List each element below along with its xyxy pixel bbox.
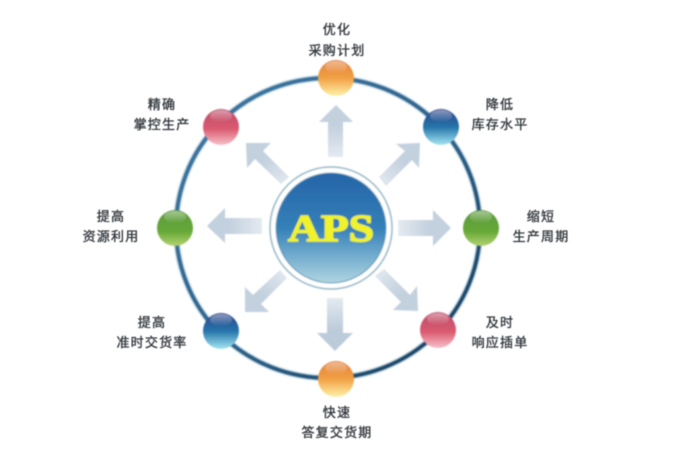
label: respond to insertions (472, 315, 528, 350)
label: shorten cycle (513, 209, 569, 244)
label: quick reply: 快速 (323, 405, 351, 420)
label: optimize purchasing (309, 22, 365, 58)
label: optimize purchasing: 采购计划 (309, 43, 365, 58)
label: on-time delivery: 准时交货率 (116, 335, 188, 350)
node: top orange (318, 60, 354, 96)
node: lower left blue (203, 313, 239, 349)
label: on-time delivery: 提高 (138, 315, 166, 330)
arrow: right (398, 210, 451, 246)
label: resource utilization: 提高 (97, 209, 125, 224)
label: resource utilization: 资源利用 (83, 229, 139, 244)
arrows (207, 105, 451, 351)
ring (176, 78, 480, 378)
label: precise control (134, 97, 190, 132)
arrow: upper left (246, 143, 289, 184)
label: precise control: 掌控生产 (134, 117, 190, 132)
label: on-time delivery (116, 315, 188, 350)
arrow: down (317, 298, 353, 351)
label: resource utilization (83, 209, 139, 244)
arrow: lower left (245, 270, 287, 312)
label: quick reply (301, 405, 373, 440)
central APS circle (270, 167, 392, 289)
label: optimize purchasing: 优化 (323, 22, 351, 37)
node: lower right red (420, 312, 456, 348)
arrow: upper right (379, 143, 420, 186)
label: reduce inventory: 降低 (486, 97, 514, 112)
label: reduce inventory (472, 97, 528, 132)
label: respond to insertions: 及时 (486, 315, 514, 330)
label: reduce inventory: 库存水平 (472, 117, 528, 132)
node: upper right blue (423, 109, 459, 145)
arrow: lower right (375, 269, 418, 311)
node: upper left red (203, 109, 239, 145)
label: quick reply: 答复交货期 (301, 425, 373, 440)
label: precise control: 精确 (148, 97, 176, 112)
node: left green (157, 210, 193, 246)
label: shorten cycle: 生产周期 (513, 229, 569, 244)
arrow: left (207, 208, 262, 243)
node: bottom orange (318, 361, 354, 397)
label: shorten cycle: 缩短 (527, 209, 555, 224)
APS label: APS (288, 208, 374, 250)
node: right green (463, 210, 499, 246)
arrow: up (319, 105, 353, 157)
label: respond to insertions: 响应插单 (472, 335, 528, 350)
